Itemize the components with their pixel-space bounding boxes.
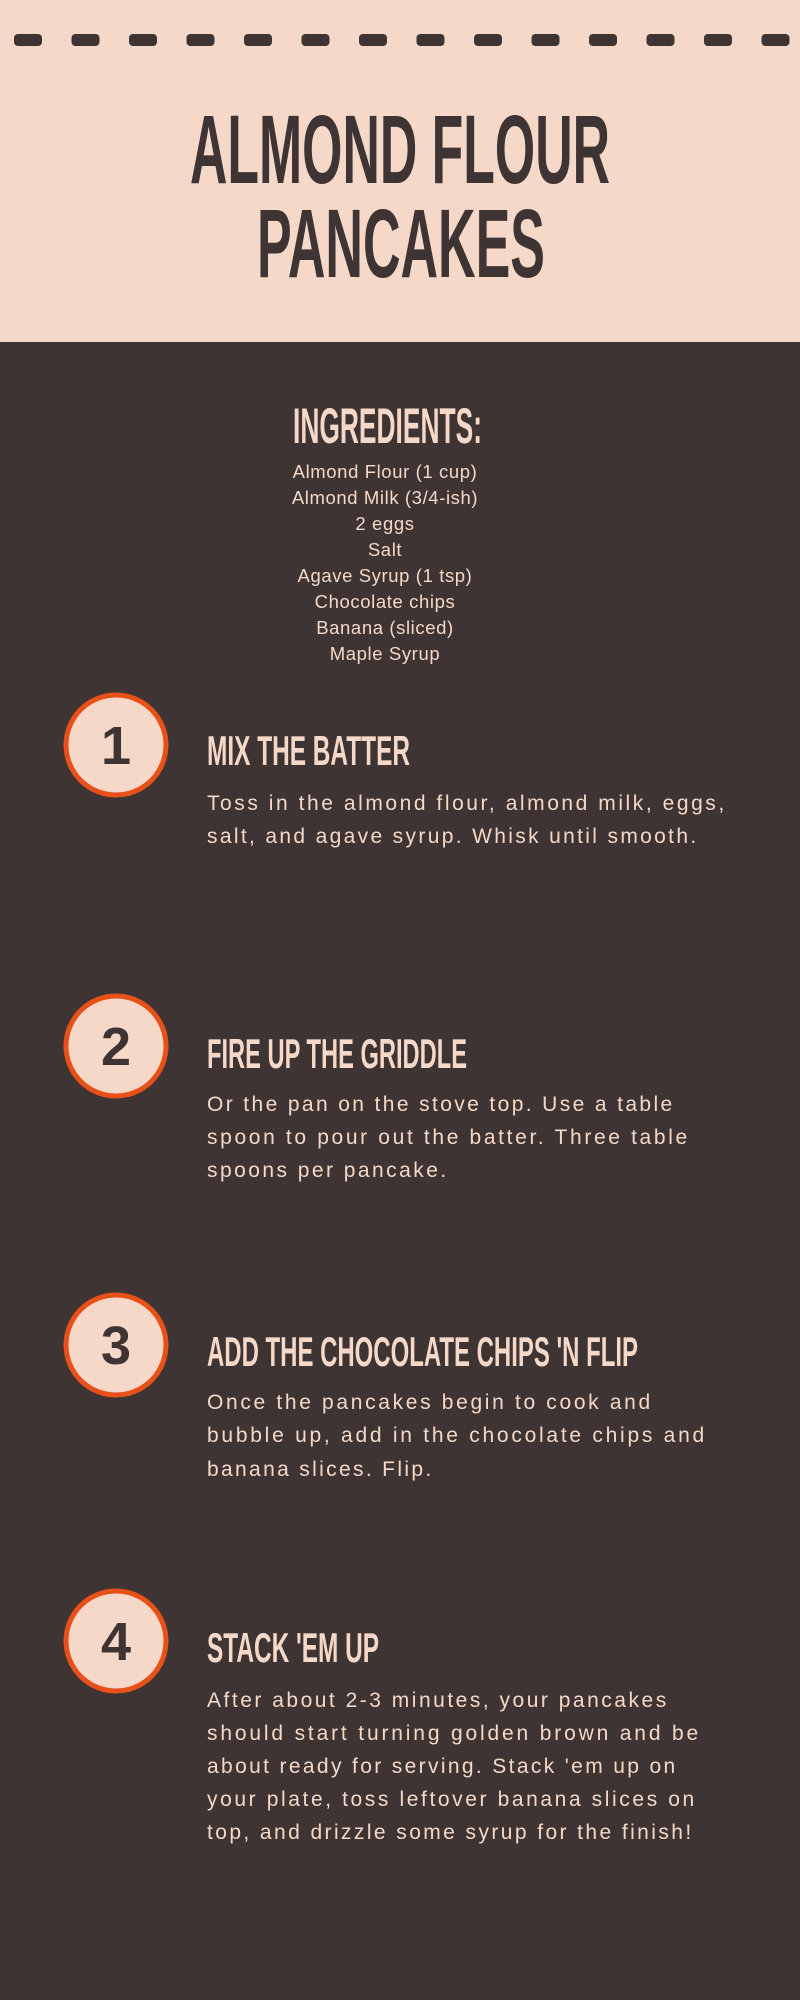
text: step 3: banana slices. Flip. (207, 1458, 432, 1481)
text: step 3: bubble up, add in the chocolate chips and (207, 1424, 705, 1447)
heading: stack em up: STACK 'EM UP (207, 1624, 379, 1671)
ingredients list: Banana (sliced) (316, 617, 454, 638)
text: step 2: Or the pan on the stove top. Use a table (207, 1093, 673, 1116)
icon: number 1 circle (66, 695, 166, 795)
ingredients list: 2 eggs (355, 513, 415, 534)
text: step 1 (207, 792, 725, 848)
ingredients list: Maple Syrup (330, 643, 440, 664)
header panel (0, 0, 800, 342)
ingredients list: Chocolate chips (315, 591, 455, 612)
ingredients list (292, 461, 478, 664)
ingredients list: Almond Milk (3/4-ish) (292, 487, 478, 508)
title: PANCAKES (257, 189, 545, 298)
icon: number 3 circle (66, 1295, 166, 1395)
text: step 4: your plate, toss leftover banana slices on (207, 1788, 695, 1811)
icon: number 3 circle: 3 (101, 1316, 131, 1376)
heading: mix the batter: MIX THE BATTER (207, 727, 410, 774)
step 1 (66, 695, 725, 848)
heading: fire up the griddle: FIRE UP THE GRIDDLE (207, 1030, 467, 1077)
icon: number 2 circle: 2 (101, 1017, 131, 1077)
icon: number 4 circle (66, 1591, 166, 1691)
text: step 3: Once the pancakes begin to cook and (207, 1391, 651, 1414)
step 4 (66, 1591, 699, 1844)
step 3 (66, 1295, 705, 1481)
text: step 4: After about 2-3 minutes, your pancakes (207, 1689, 667, 1712)
step 2 (66, 996, 688, 1182)
text: step 2: spoon to pour out the batter. Three table (207, 1126, 688, 1149)
text: step 1: Toss in the almond flour, almond milk, eggs, (207, 792, 725, 815)
text: step 1: salt, and agave syrup. Whisk until smooth. (207, 825, 697, 848)
icon: number 4 circle: 4 (101, 1612, 131, 1672)
ingredients list: Salt (368, 539, 402, 560)
text: step 4: should start turning golden brown and be (207, 1722, 699, 1745)
text: step 2 (207, 1093, 688, 1182)
ingredients heading: INGREDIENTS: (293, 398, 482, 454)
icon: number 1 circle: 1 (101, 716, 131, 776)
ingredients list: Agave Syrup (1 tsp) (298, 565, 472, 586)
text: step 4: about ready for serving. Stack 'em up on (207, 1755, 676, 1778)
text: step 3 (207, 1391, 705, 1481)
ingredients list: Almond Flour (1 cup) (293, 461, 477, 482)
title (190, 95, 610, 298)
text: step 2: spoons per pancake. (207, 1159, 447, 1182)
icon: number 2 circle (66, 996, 166, 1096)
text: step 4 (207, 1689, 699, 1844)
text: step 4: top, and drizzle some syrup for the finish! (207, 1821, 692, 1844)
